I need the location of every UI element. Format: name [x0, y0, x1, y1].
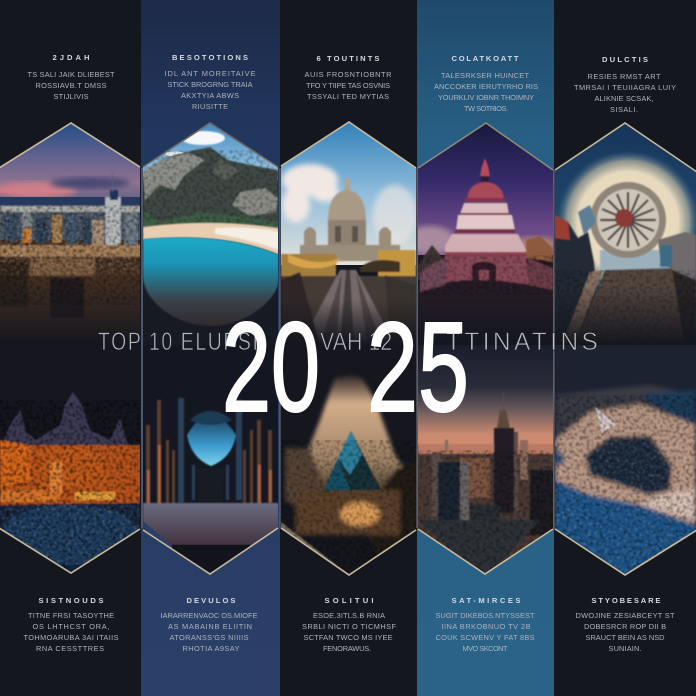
top text: column 5: SISALI.: [610, 105, 638, 114]
year 2025: 20: [222, 296, 320, 438]
gold hexagon frames: [0, 122, 696, 575]
photo: snowy mountain range: [555, 345, 696, 580]
photo: dusk skyline with skyscraper: [418, 345, 554, 580]
bottom text: column 1: TITNE FRSI TASOYTHE: [28, 611, 114, 620]
top text: column 5: DULCTIS: [602, 55, 648, 64]
bottom text: column 5: DOBESRCR ROP DII B: [584, 622, 666, 631]
top text: column 1: TS SALI JAIK DLIEBEST: [28, 70, 115, 79]
column backgrounds: [141, 0, 554, 696]
photo: tiered red pagoda: [418, 124, 553, 345]
bottom text: column 1: OS LHTHCST ORA,: [32, 622, 110, 631]
bottom text: column 3: SCTFAN TWCO MS IYEE: [304, 633, 393, 642]
column divider strips: [141, 168, 555, 530]
photo: mountain and turquoise bay: [143, 120, 279, 345]
bottom text: column 4: [436, 596, 535, 653]
bottom text: column 2: DEVULOS: [186, 596, 236, 605]
photo: pyramid and silhouette: [281, 374, 416, 574]
bottom text: column 5: STYOBESARE: [592, 596, 660, 605]
top text: column 4: TALESRKSER HUINCET: [441, 71, 529, 80]
top text: column 4: YOURKLIV IOBNR THOIMNY: [438, 93, 534, 102]
photo: night city skyline: [0, 120, 141, 345]
top text: column 5: TMRSAI I TEUIIAGRA LUIY: [574, 83, 676, 92]
top text: column 5: RESIES RMST ART: [588, 72, 661, 81]
top text: column 2: BESOTOTIONS: [172, 53, 248, 62]
bottom text: column 4: SUGIT DIKEBDS.NTYSSEST: [436, 611, 535, 620]
main title: TOP 10 ELUPSI: [98, 328, 258, 356]
year 2025: [222, 296, 469, 438]
bottom text: column 3: ESOE.3ITLS.B RNIA: [313, 611, 385, 620]
bottom text: column 5: DWOJINE ZESIABCEYT ST: [576, 611, 675, 620]
top text: column 2: IDL ANT MOREITAIVE: [164, 69, 256, 78]
top text: column 3: [304, 54, 392, 101]
bottom text: column 3: SOLITUI: [324, 596, 374, 605]
top text: column 3: TSSYALI TED MYTIAS: [307, 92, 389, 101]
main title: TTINATINS: [446, 329, 598, 356]
top text: column 5: ALIKNIE SCSAK,: [594, 94, 654, 103]
bottom text: column 1: RNA CESSTTRES: [36, 644, 104, 653]
top text: column 2: STICK BROGRNG TRAIA: [168, 80, 253, 89]
main title: VAH 12: [320, 327, 392, 355]
top text: column 1: 2JDAH: [52, 53, 90, 62]
bottom text: column 2: RHOTIA A9SAY: [182, 644, 240, 653]
top text: column 5: [574, 55, 676, 114]
top text: column 3: TFO Y TIIPE TAS OSVNIS: [306, 81, 390, 90]
bottom text: column 3: [302, 596, 396, 653]
bottom text: column 4: IINA BRKOBNUO TV 2B: [442, 622, 531, 631]
top text: column 4: TW SOTRIOS.: [464, 104, 508, 113]
main title: [98, 327, 598, 356]
bottom text: column 2: ATORANSS'GS NIIIIS: [170, 633, 249, 642]
bottom text: column 5: [576, 596, 675, 653]
top text: column 4: [434, 54, 538, 113]
top text: column 1: STIJLIVIS: [54, 92, 89, 101]
bottom text: column 1: [24, 596, 119, 653]
top text: column 4: ANCCOKER IERUTYRHO RIS: [434, 82, 538, 91]
bottom text: column 2: AS MABAINB ELIITIN: [168, 622, 252, 631]
photo: illuminated palace at night: [0, 392, 140, 572]
bottom text: column 1: TOHMOARUBA 3AI ITAIIS: [24, 633, 119, 642]
bottom text: column 3: SRBLI NICTI O TICMHSF: [302, 622, 396, 631]
top text: column 4: COLATKOATT: [452, 54, 519, 63]
top text: column 2: AKXTYIA ABWS: [181, 91, 239, 100]
bottom text: column 5: SRAUCT BEIN AS NSD: [586, 633, 664, 642]
bottom text: column 5: SUNIAIN.: [608, 644, 642, 653]
photo: giant carved wheel and boardwalk: [555, 120, 696, 345]
bottom text: column 2: [160, 596, 258, 653]
top text: column 2: [164, 53, 256, 111]
year 2025: 25: [367, 296, 469, 438]
photo: domed basilica: [281, 120, 417, 345]
top text: column 2: RIUSITTE: [192, 102, 228, 111]
top text: column 1: ROSSIAVB.T DMSS: [36, 81, 107, 90]
bottom text: column 2: IARARRENVAOC OS.MIOFE: [160, 611, 258, 620]
top text: column 1: [28, 53, 115, 101]
bottom text: column 1: SISTNOUDS: [38, 596, 104, 605]
top text: column 3: 6 TOUTINTS: [316, 54, 380, 63]
bottom text: column 3: FENORAWUS.: [323, 644, 371, 653]
bottom text: column 4: COUK SCWENV Y FAT 8BS: [436, 633, 535, 642]
bottom text: column 4: SAT-MIRCES: [452, 596, 520, 605]
top text: column 3: AUIS FROSNTIOBNTR: [304, 70, 392, 79]
photo: cathedral nave with blue crystal: [143, 345, 279, 580]
bottom text: column 4: MVO SKCONT: [462, 644, 508, 653]
